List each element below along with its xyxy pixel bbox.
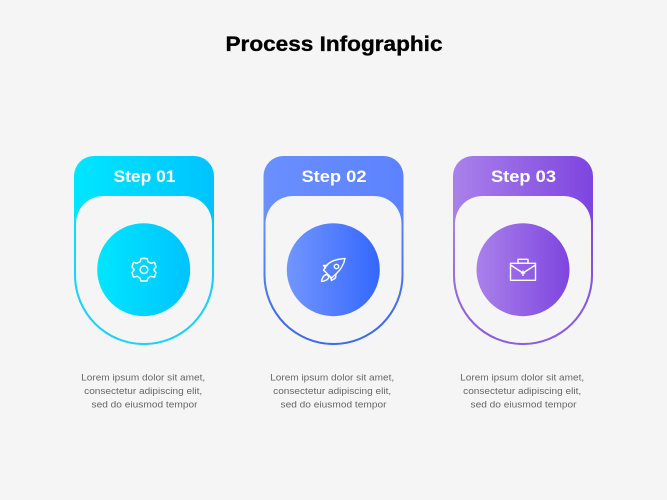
description: step 02: consectetur adipiscing elit, (273, 386, 391, 397)
icon: rocket (322, 258, 345, 282)
panel: step 02 (264, 156, 404, 410)
card outline: step 03 (453, 156, 593, 345)
description: step 01: Lorem ipsum dolor sit amet, (81, 372, 205, 384)
circle: step 02 (287, 223, 380, 316)
icon: briefcase (510, 259, 536, 280)
description: step 01: sed do eiusmod tempor (92, 400, 198, 410)
description: step 03: consectetur adipiscing elit, (463, 386, 581, 397)
panel: step 01 (74, 156, 214, 410)
heading: step 02: Step 02 (302, 167, 366, 186)
icon: gear (132, 258, 156, 281)
description: step 01: consectetur adipiscing elit, (84, 386, 202, 397)
circle: step 03 (476, 223, 570, 316)
description: step 03: Lorem ipsum dolor sit amet, (460, 372, 584, 384)
circle: step 01 (97, 223, 190, 316)
heading: step 01: Step 01 (114, 167, 176, 186)
description: step 03: sed do eiusmod tempor (470, 400, 576, 410)
title: Process Infographic (226, 33, 443, 56)
description: step 02: sed do eiusmod tempor (280, 400, 386, 410)
card outline: step 01 (74, 156, 214, 345)
panel: step 03 (453, 156, 593, 410)
card outline: step 02 (264, 156, 404, 345)
heading: step 03: Step 03 (491, 167, 556, 186)
description: step 02: Lorem ipsum dolor sit amet, (270, 372, 394, 384)
